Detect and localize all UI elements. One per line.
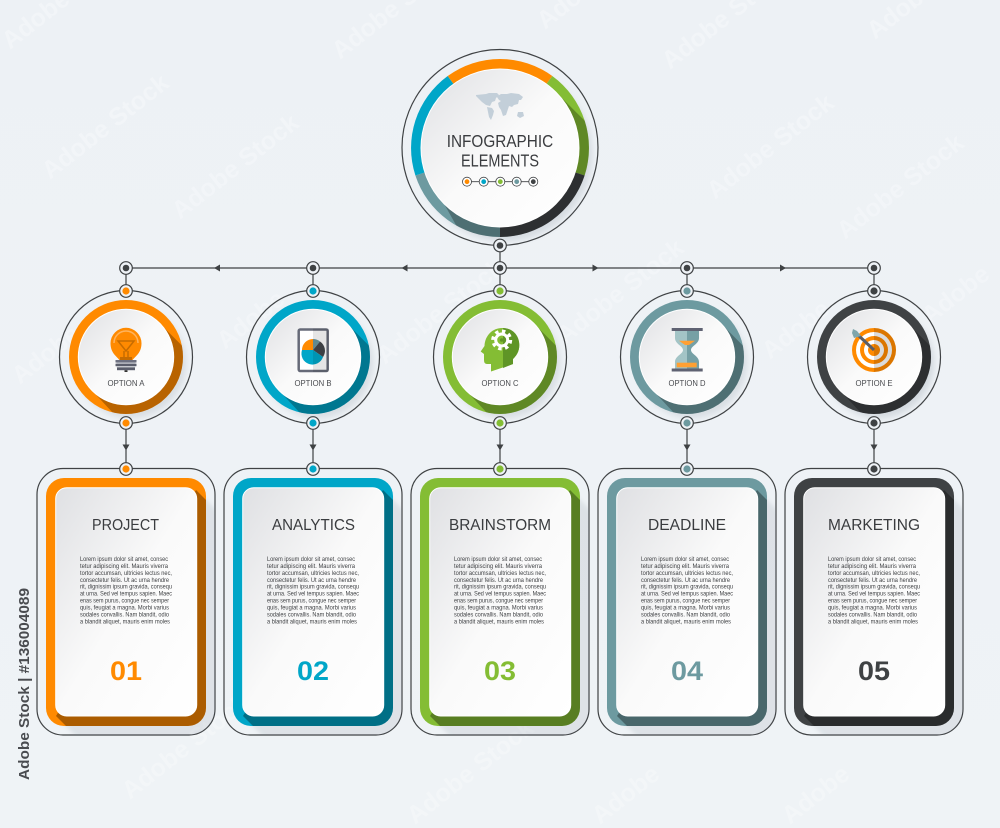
- body text: sodales convallis. Nam blandit, odio: [80, 611, 169, 618]
- body text: rit, dignissim ipsum gravida, consequ: [454, 584, 546, 591]
- body text: tortor accumsan, ultricies lectus nec,: [641, 570, 733, 577]
- body text: quis, feugiat a magna. Morbi varius: [641, 604, 730, 612]
- body text: tetur adipiscing elit. Mauris viverra: [454, 563, 542, 570]
- card 01: project: [37, 468, 240, 760]
- body text: rit, dignissim ipsum gravida, consequ: [641, 584, 733, 591]
- body text: a blandit aliquet, mauris enim moles: [454, 618, 544, 625]
- body text: [454, 556, 546, 625]
- body text: Lorem ipsum dolor sit amet, consec: [454, 556, 542, 563]
- body text: Lorem ipsum dolor sit amet, consec: [828, 556, 916, 563]
- body text: at urna. Sed vel tempus sapien. Maec: [828, 591, 920, 598]
- body text: a blandit aliquet, mauris enim moles: [80, 618, 170, 625]
- body text: consectetur felis. Ut ac urna hendre: [267, 577, 356, 584]
- card title: MARKETING: [828, 517, 920, 534]
- hub title: ELEMENTS: [461, 151, 539, 171]
- option E circle: [808, 290, 944, 427]
- body text: enas sem purus, congue nec semper: [641, 598, 731, 605]
- body text: quis, feugiat a magna. Morbi varius: [267, 604, 356, 612]
- body text: [267, 556, 359, 625]
- body text: enas sem purus, congue nec semper: [454, 598, 544, 605]
- body text: enas sem purus, congue nec semper: [267, 598, 357, 605]
- body text: rit, dignissim ipsum gravida, consequ: [267, 584, 359, 591]
- icon: target with dart: [852, 328, 896, 372]
- body text: at urna. Sed vel tempus sapien. Maec: [267, 591, 359, 598]
- body text: sodales convallis. Nam blandit, odio: [454, 611, 543, 618]
- option C circle: [434, 290, 570, 427]
- body text: quis, feugiat a magna. Morbi varius: [454, 604, 543, 612]
- icon: head with gear: [481, 328, 519, 372]
- card 02: analytics: [223, 468, 403, 736]
- watermark: Adobe: [776, 760, 855, 828]
- body text: consectetur felis. Ut ac urna hendre: [80, 577, 169, 584]
- body text: enas sem purus, congue nec semper: [80, 598, 170, 605]
- watermark: Adobe: [6, 320, 85, 390]
- body text: Lorem ipsum dolor sit amet, consec: [641, 556, 729, 563]
- body text: at urna. Sed vel tempus sapien. Maec: [80, 591, 172, 598]
- option B circle: [246, 290, 383, 427]
- body text: [641, 556, 733, 625]
- card number: 03: [484, 656, 516, 686]
- body text: tetur adipiscing elit. Mauris viverra: [828, 563, 916, 570]
- card number: 04: [671, 656, 703, 686]
- card title: DEADLINE: [648, 517, 726, 534]
- node dots: [122, 242, 878, 473]
- option A circle: [60, 290, 196, 427]
- card number: 01: [110, 656, 142, 686]
- card title: BRAINSTORM: [449, 517, 551, 534]
- option D circle: [620, 290, 757, 427]
- hub soft shadow: [418, 67, 592, 241]
- watermark: Adobe: [916, 260, 995, 330]
- hub title: [447, 131, 553, 171]
- stock credit: Adobe Stock | #136004089: [16, 588, 33, 780]
- body text: quis, feugiat a magna. Morbi varius: [80, 604, 169, 612]
- label: option E: OPTION E: [856, 379, 892, 388]
- hub title: INFOGRAPHIC: [447, 131, 553, 151]
- watermark: Adobe Stock: [116, 689, 254, 805]
- card 05: marketing: [784, 468, 964, 736]
- label: option B: OPTION B: [294, 379, 332, 388]
- watermark: Adobe Stock: [401, 714, 539, 828]
- connector lines and arrows: [122, 245, 878, 469]
- label: option D: OPTION D: [668, 379, 706, 388]
- card 03: brainstorm: [410, 468, 590, 736]
- label: option A: OPTION A: [108, 379, 145, 388]
- body text: quis, feugiat a magna. Morbi varius: [828, 604, 917, 612]
- card number: 05: [858, 656, 890, 686]
- watermark: Adobe Stock: [831, 129, 969, 245]
- body text: [80, 556, 172, 625]
- watermark: Adobe Stock: [371, 254, 509, 370]
- body text: consectetur felis. Ut ac urna hendre: [641, 577, 730, 584]
- body text: tetur adipiscing elit. Mauris viverra: [267, 563, 355, 570]
- icon: hourglass: [672, 328, 703, 372]
- body text: tetur adipiscing elit. Mauris viverra: [80, 563, 168, 570]
- world map: [476, 93, 524, 120]
- body text: sodales convallis. Nam blandit, odio: [267, 611, 356, 618]
- body text: at urna. Sed vel tempus sapien. Maec: [641, 591, 733, 598]
- watermark: Adobe Stock: [701, 89, 839, 205]
- body text: tortor accumsan, ultricies lectus nec,: [267, 570, 359, 577]
- card title: ANALYTICS: [272, 517, 355, 534]
- icon: tablet with pie chart: [299, 328, 328, 372]
- watermark: Adobe: [756, 295, 835, 365]
- body text: rit, dignissim ipsum gravida, consequ: [828, 584, 920, 591]
- body text: tetur adipiscing elit. Mauris viverra: [641, 563, 729, 570]
- body text: a blandit aliquet, mauris enim moles: [641, 618, 731, 625]
- body text: tortor accumsan, ultricies lectus nec,: [828, 570, 920, 577]
- watermark: Adobe: [586, 760, 665, 828]
- body text: a blandit aliquet, mauris enim moles: [267, 618, 357, 625]
- body text: sodales convallis. Nam blandit, odio: [828, 611, 917, 618]
- card 04: deadline: [597, 468, 777, 736]
- label: option C: OPTION C: [482, 379, 519, 388]
- hub white disc: [421, 69, 579, 227]
- body text: [828, 556, 920, 625]
- hub coloured segments: [411, 59, 589, 237]
- body text: a blandit aliquet, mauris enim moles: [828, 618, 918, 625]
- mini timeline: [462, 177, 538, 186]
- central hub: [402, 50, 600, 250]
- body text: consectetur felis. Ut ac urna hendre: [828, 577, 917, 584]
- icon: light bulb: [110, 328, 142, 372]
- body text: rit, dignissim ipsum gravida, consequ: [80, 584, 172, 591]
- body text: Lorem ipsum dolor sit amet, consec: [80, 556, 168, 563]
- watermark: Adobe Stock: [166, 109, 304, 225]
- connector nodes: [120, 239, 880, 475]
- card title: PROJECT: [92, 517, 159, 534]
- watermark: Adobe Stock: [36, 69, 174, 185]
- watermark: Adobe Stock: [551, 234, 689, 350]
- body text: consectetur felis. Ut ac urna hendre: [454, 577, 543, 584]
- body text: enas sem purus, congue nec semper: [828, 598, 918, 605]
- watermark: Adobe: [211, 285, 290, 355]
- body text: tortor accumsan, ultricies lectus nec,: [454, 570, 546, 577]
- hub outer ring: [402, 50, 598, 246]
- body text: tortor accumsan, ultricies lectus nec,: [80, 570, 172, 577]
- body text: Lorem ipsum dolor sit amet, consec: [267, 556, 355, 563]
- card number: 02: [297, 656, 329, 686]
- body text: sodales convallis. Nam blandit, odio: [641, 611, 730, 618]
- body text: at urna. Sed vel tempus sapien. Maec: [454, 591, 546, 598]
